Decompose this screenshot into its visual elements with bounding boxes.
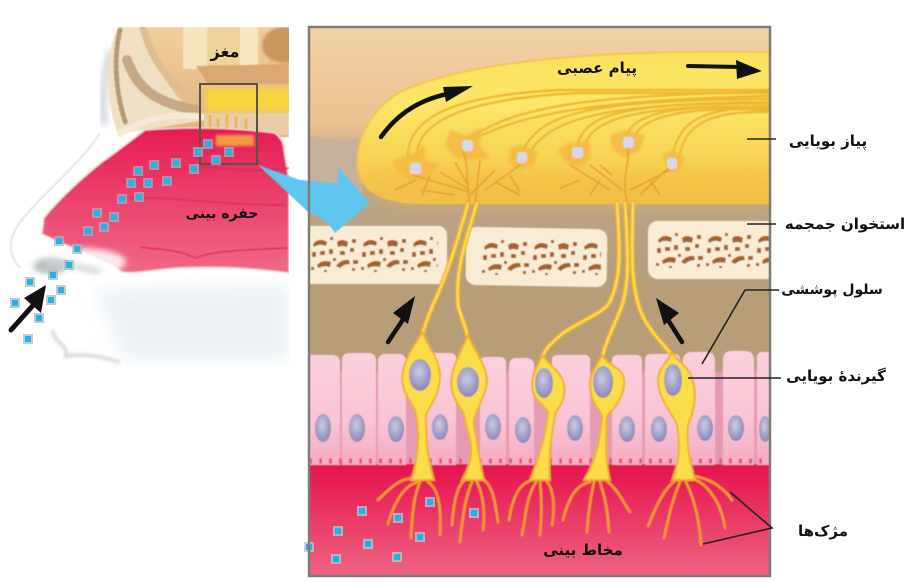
- receptor neuron 5: [658, 352, 695, 480]
- odor particles: mucosa: [304, 497, 479, 564]
- blue arrow: magnified view: [258, 165, 370, 233]
- zoom box: [200, 84, 257, 164]
- odor particles: nasal passage: [10, 139, 234, 344]
- tan fold: [310, 136, 362, 194]
- face outline: [11, 133, 120, 362]
- label: supporting cell: سلول پوششی: [781, 282, 883, 298]
- cranial tan background: [145, 27, 289, 137]
- arrow: air entering nostril: [11, 285, 46, 330]
- receptor neuron 1: [402, 332, 440, 480]
- panel frame: [309, 27, 770, 576]
- dendritic tufts: [395, 148, 670, 205]
- supporting cell nuclei: [315, 414, 771, 443]
- arrow: upward right: [656, 298, 682, 342]
- label: nerve message: پیام عصبی: [557, 59, 637, 78]
- olfactory bulb glimpse: [204, 88, 291, 136]
- receptor neuron 4: [584, 355, 624, 480]
- label: olfactory bulb: پیاز بویایی: [789, 132, 867, 151]
- panel background: [310, 28, 769, 373]
- fade at nostril: [68, 244, 130, 271]
- cilia: [378, 476, 732, 545]
- mitral cells: [392, 128, 685, 182]
- leader lines: [688, 139, 781, 544]
- lower face shading: [95, 284, 289, 360]
- label: nasal cavity: حفره بینی: [186, 206, 258, 222]
- panel: nose cross-section: [10, 27, 306, 362]
- cell layer backing: [340, 372, 758, 465]
- label: nasal mucosa: مخاط بینی: [543, 541, 623, 559]
- arrow: nerve signal curved: [381, 86, 473, 137]
- nerve fibres to the right: [408, 90, 770, 160]
- brain blocks: [182, 27, 289, 84]
- olfactory receptor neurons: [402, 332, 695, 480]
- supporting cells: [305, 351, 773, 465]
- label: skull bone: استخوان جمجمه: [785, 215, 905, 233]
- nasal cavity: [42, 128, 289, 273]
- nasal bone: [108, 27, 205, 134]
- receptor neuron 2: [451, 335, 487, 480]
- receptor neuron nuclei: [409, 359, 682, 398]
- axon strands: [422, 203, 672, 358]
- panel: magnified olfactory epithelium: [258, 27, 776, 576]
- axon strand cores: [422, 203, 672, 358]
- bulb lower glow: [360, 181, 768, 210]
- arrow: upward left: [388, 296, 415, 342]
- label: olfactory receptor: گیرندهٔ بویایی: [786, 367, 886, 385]
- receptor neuron 3: [530, 355, 565, 480]
- label: cilia: مژک‌ها: [798, 522, 848, 540]
- arrow: nerve signal right: [688, 60, 762, 79]
- forehead shadow: [103, 50, 112, 125]
- olfactory patch: [216, 135, 254, 146]
- mucosa layer: [309, 464, 770, 576]
- olfactory bulb: [358, 52, 770, 203]
- cavity folds: [130, 166, 289, 258]
- cell nuclei: [410, 137, 677, 174]
- cell base teeth: [309, 458, 770, 464]
- label: brain: مغز: [210, 42, 239, 61]
- bones of the skull: [303, 221, 776, 287]
